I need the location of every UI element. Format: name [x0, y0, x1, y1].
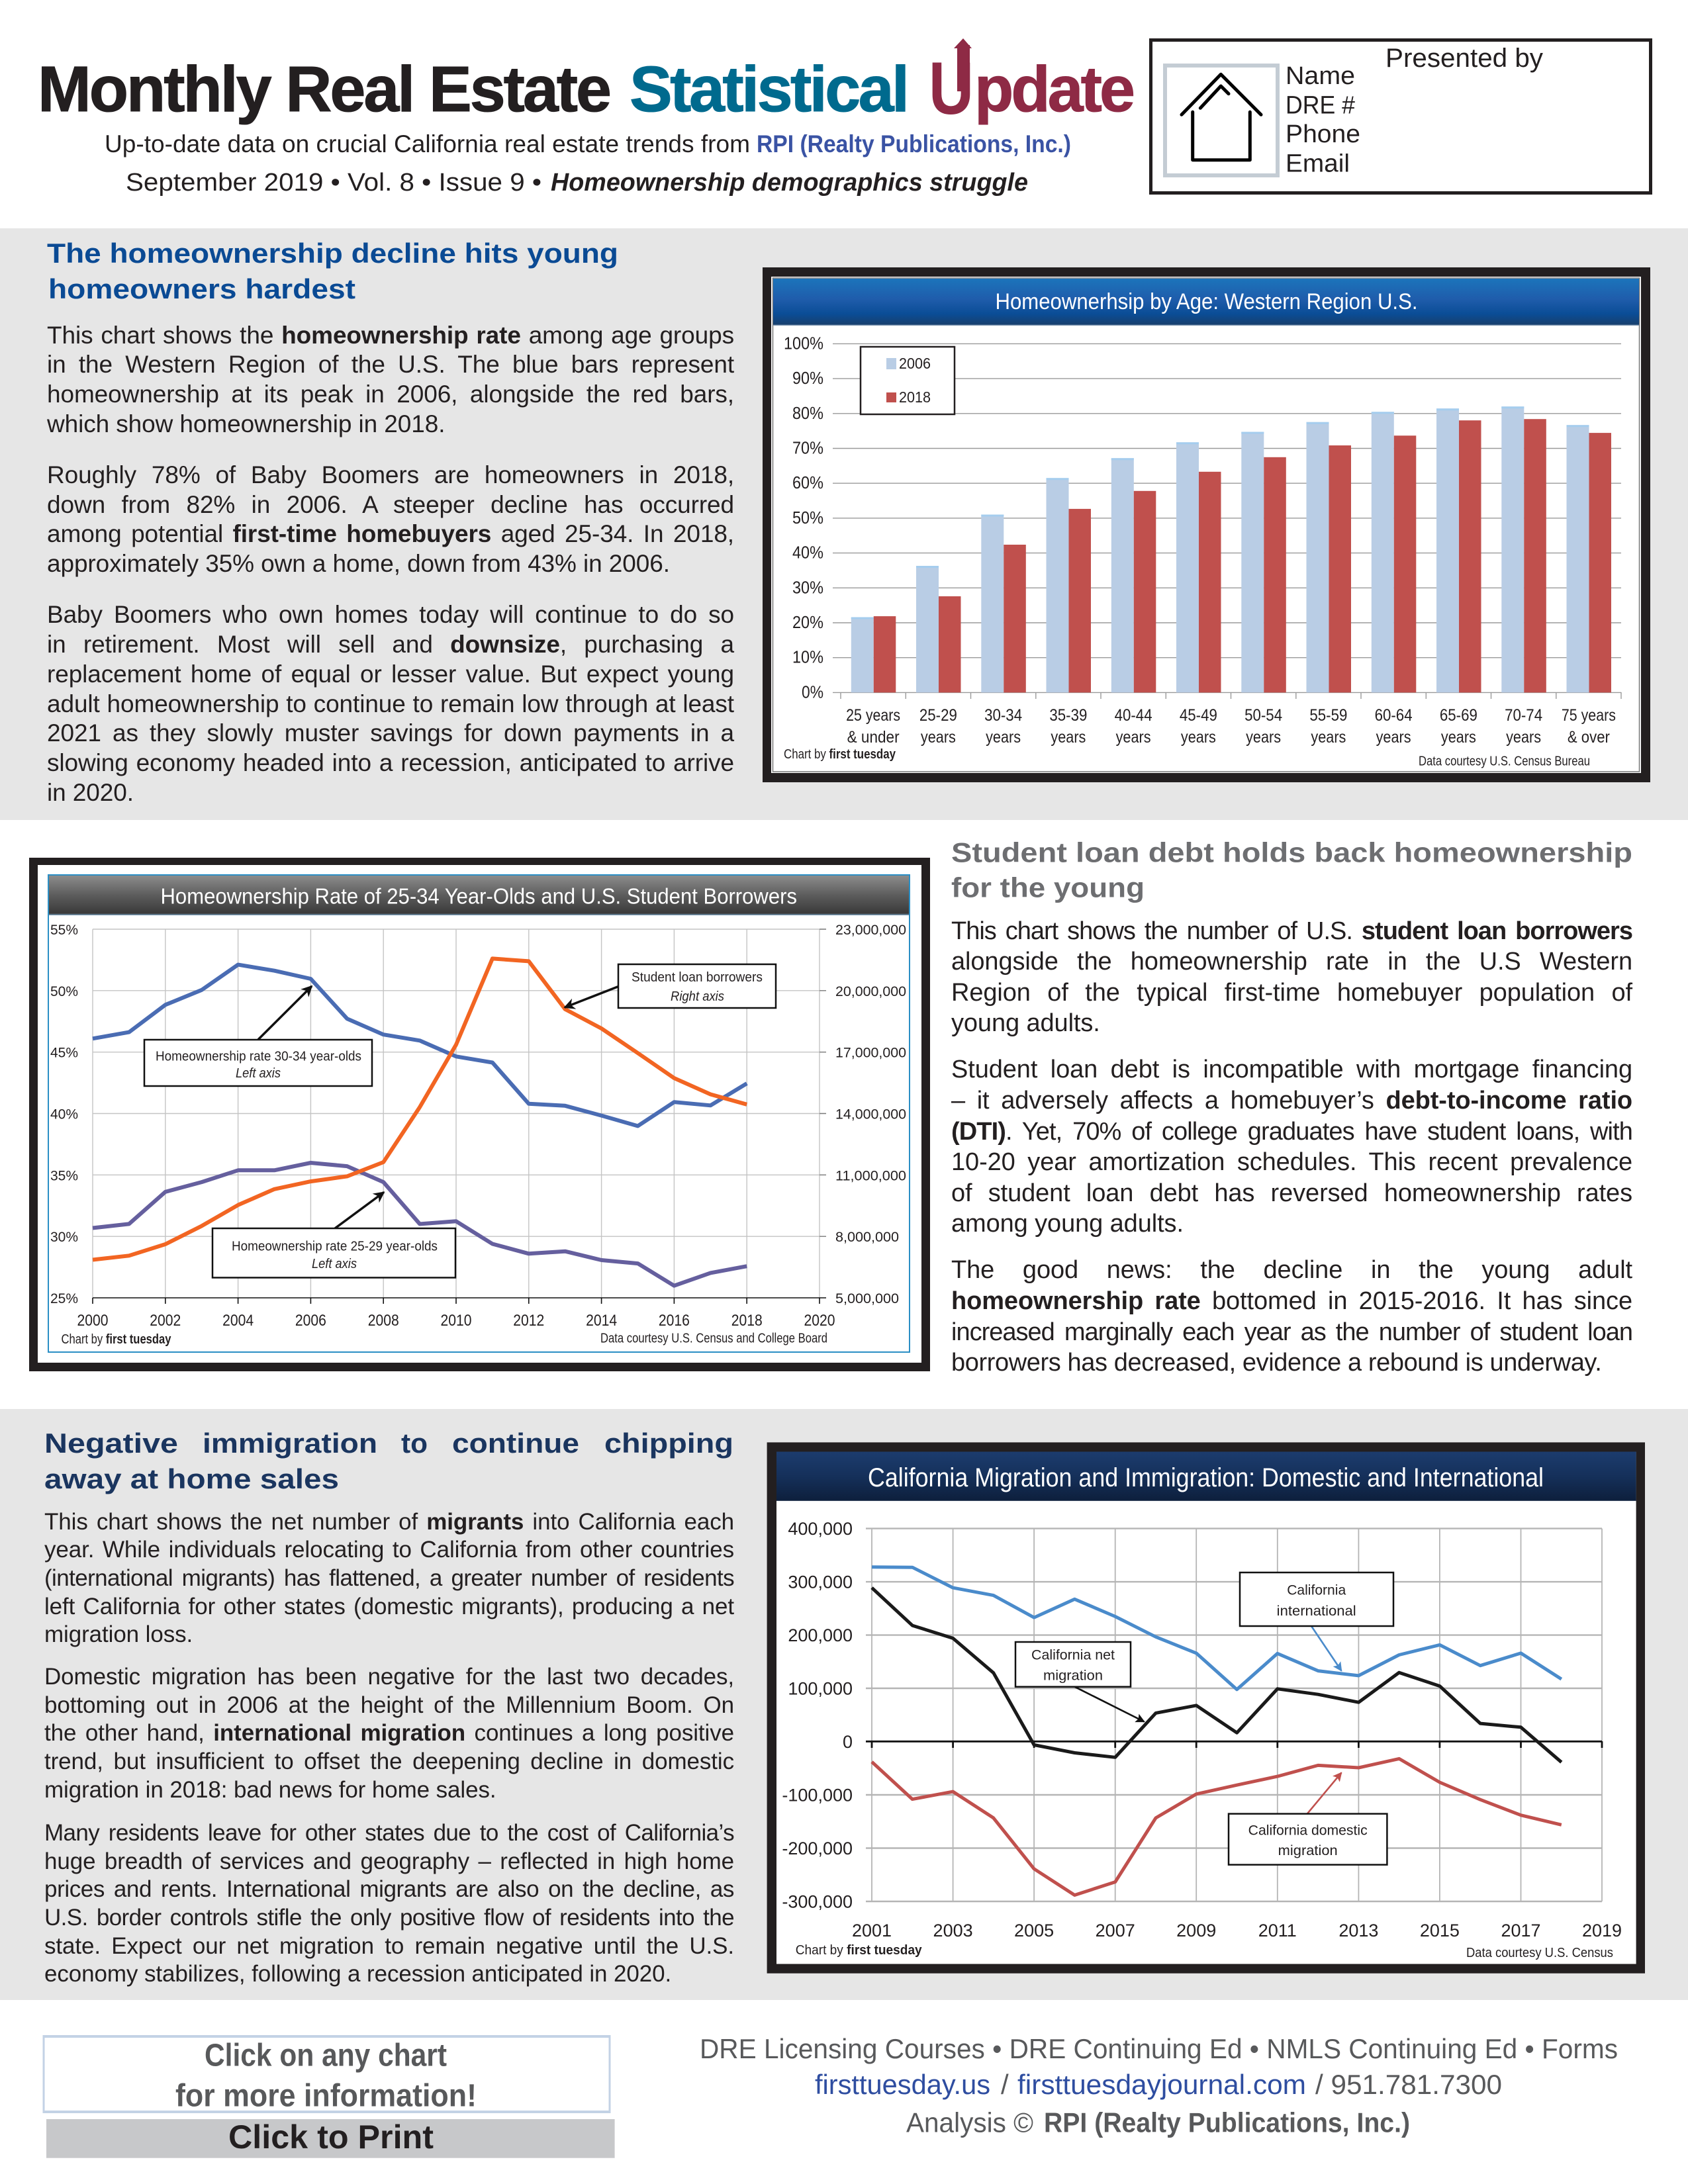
- x axis labels: years: [1051, 728, 1086, 747]
- text block: paragraph 1: which show homeownership in 2018.: [47, 410, 445, 437]
- footer contact line: firsttuesday.us: [815, 2069, 990, 2100]
- text block: paragraph 2: the other hand, international migration continues a long positive: [44, 1720, 734, 1746]
- x axis labels: 2020: [804, 1312, 835, 1330]
- chart credit: Chart by first tuesday: [784, 747, 896, 762]
- x axis labels: 2012: [513, 1312, 544, 1330]
- y axis labels: 20%: [792, 612, 823, 632]
- x axis labels: years: [1116, 728, 1151, 747]
- y axis labels: 90%: [792, 368, 823, 388]
- text block: paragraph 3: in 2020.: [47, 779, 134, 806]
- x axis labels: 30-34: [984, 706, 1022, 725]
- x axis labels: 25 years: [846, 706, 900, 725]
- text block: paragraph 2: [44, 1664, 734, 1803]
- text block: paragraph 3: Baby Boomers who own homes today will continue to do so: [47, 601, 734, 628]
- callout: click on any chart: for more information!: [175, 2079, 477, 2114]
- title: Monthly Real Estate: [38, 53, 612, 125]
- title: pdate: [974, 53, 1135, 125]
- y axis labels: -200,000: [782, 1839, 853, 1858]
- text block: paragraph 1: This chart shows the number of U.S. student loan borrowers: [951, 917, 1632, 945]
- y axis labels: 400,000: [788, 1519, 853, 1539]
- x axis labels: years: [1376, 728, 1411, 747]
- subtitle: Up-to-date data on crucial California real estate trends from: [105, 130, 750, 158]
- x axis labels: & under: [847, 728, 900, 747]
- footer analysis line: Analysis ©: [906, 2107, 1033, 2138]
- y axis labels: 0: [843, 1732, 853, 1752]
- callout: international: California: [1287, 1583, 1346, 1598]
- text block: paragraph 2: among young adults.: [951, 1210, 1184, 1238]
- text block: paragraph 1: This chart shows the homeownership rate among age groups: [47, 322, 734, 348]
- right axis labels: 14,000,000: [835, 1107, 906, 1122]
- x axis labels: [846, 706, 1616, 747]
- text block: paragraph 2: [47, 461, 734, 577]
- x axis labels: 2009: [1176, 1921, 1216, 1940]
- heading: Negative: [44, 1428, 178, 1459]
- callout: net migration: California net: [1031, 1647, 1115, 1662]
- y axis labels: 80%: [792, 403, 823, 423]
- x axis labels: 2011: [1258, 1921, 1297, 1940]
- right axis labels: [835, 923, 906, 1306]
- x axis labels: 2001: [852, 1921, 892, 1940]
- presenter box: Name: [1286, 62, 1355, 90]
- footer analysis line: RPI (Realty Publications, Inc.): [1044, 2107, 1410, 2138]
- callout: 25-29 year-olds: [212, 1192, 455, 1277]
- series: 2006 bars: [851, 406, 1589, 692]
- heading: immigration: [203, 1428, 377, 1459]
- callout: domestic migration: [1229, 1772, 1387, 1865]
- x axis labels: 2014: [586, 1312, 617, 1330]
- presenter box: Presented by: [1385, 44, 1543, 73]
- chart title: Homeownership Rate of 25-34 Year-Olds and U.S. Student Borrowers: [160, 884, 797, 909]
- callout: 30-34 year-olds: [144, 986, 372, 1086]
- x axis labels: 40-44: [1115, 706, 1152, 725]
- y axis labels: 40%: [792, 543, 823, 563]
- callout: student loan borrowers: Right axis: [671, 989, 724, 1004]
- y axis labels: 100,000: [788, 1678, 853, 1698]
- chart title: California Migration and Immigration: Domestic and International: [868, 1463, 1544, 1492]
- x axis labels: years: [921, 728, 956, 747]
- footer contact line: [815, 2069, 1502, 2100]
- x axis labels: 2002: [150, 1312, 181, 1330]
- callout: domestic migration: migration: [1278, 1843, 1338, 1858]
- series: homeownership rate 25-29: [93, 1163, 747, 1286]
- callout: 25-29 year-olds: Homeownership rate 25-29 year-olds: [232, 1240, 438, 1254]
- callout: international: international: [1277, 1604, 1356, 1619]
- subtitle: [105, 130, 1071, 158]
- text block: paragraph 1: This chart shows the net number of migrants into California each: [44, 1509, 734, 1535]
- text block: paragraph 3: Many residents leave for other states due to the cost of California’s: [44, 1820, 734, 1846]
- presenter box: Phone: [1286, 120, 1360, 148]
- text block: paragraph 2: 10-20 year amortization schedules. This recent prevalence: [951, 1148, 1632, 1176]
- text block: paragraph 2: migration in 2018: bad news for home sales.: [44, 1777, 496, 1803]
- text block: paragraph 3: homeownership rate bottomed in 2015-2016. It has since: [951, 1287, 1632, 1315]
- text block: paragraph 2: Domestic migration has been negative for the last two decades,: [44, 1664, 734, 1690]
- axis: [866, 1741, 1602, 1748]
- callout: student loan borrowers: Student loan borrowers: [632, 970, 763, 985]
- heading: homeowners hardest: [48, 273, 355, 304]
- text block: paragraph 2: down from 82% in 2006. A steeper decline has occurred: [47, 491, 734, 518]
- line chart: ownership rate vs student borrowers: [29, 858, 930, 1371]
- callout: 30-34 year-olds: Left axis: [236, 1066, 281, 1081]
- heading: for the young: [951, 872, 1145, 903]
- heading: [951, 837, 1632, 903]
- line chart: california migration: [767, 1442, 1645, 1974]
- callout: 30-34 year-olds: Homeownership rate 30-34 year-olds: [156, 1049, 361, 1064]
- panel: migration: [0, 1409, 1688, 2000]
- series: international: [872, 1567, 1562, 1690]
- callout: 25-29 year-olds: Left axis: [312, 1257, 357, 1271]
- text block: paragraph 2: Roughly 78% of Baby Boomers are homeowners in 2018,: [47, 461, 734, 488]
- series: 2018 bars: [874, 419, 1611, 692]
- right axis labels: 20,000,000: [835, 984, 906, 999]
- callout: student loan borrowers: [565, 964, 776, 1008]
- footer contact line: firsttuesdayjournal.com: [1017, 2069, 1306, 2100]
- x axis labels: years: [1181, 728, 1216, 747]
- panel: footer: [42, 2033, 1618, 2158]
- x axis labels: 2007: [1096, 1921, 1135, 1940]
- text block: paragraph 3: in retirement. Most will sell and downsize, purchasing a: [47, 631, 734, 658]
- x axis labels: 2010: [441, 1312, 471, 1330]
- x axis labels: & over: [1568, 728, 1610, 747]
- text block: paragraph 1: [951, 917, 1632, 1037]
- title: Statistical: [630, 53, 910, 125]
- text block: paragraph 1: year. While individuals relocating to California from other countries: [44, 1537, 734, 1563]
- legend: 2018: [899, 388, 931, 406]
- callout: click on any chart: Click on any chart: [205, 2038, 447, 2073]
- presenter box: [1150, 40, 1651, 193]
- x axis labels: 2000: [77, 1312, 109, 1330]
- x axis labels: years: [1506, 728, 1541, 747]
- text block: paragraph 2: among potential first-time homebuyers aged 25-34. In 2018,: [47, 520, 734, 547]
- text block: paragraph 2: Student loan debt is incompatible with mortgage financing: [951, 1056, 1632, 1083]
- footer contact line: /: [1001, 2069, 1009, 2100]
- right axis labels: 8,000,000: [835, 1230, 899, 1245]
- x axis labels: 2004: [222, 1312, 254, 1330]
- x axis labels: 55-59: [1309, 706, 1347, 725]
- heading: chipping: [604, 1428, 733, 1459]
- callout: click on any chart: [43, 2035, 610, 2114]
- heading: Student loan debt holds back homeownership: [951, 837, 1632, 868]
- callout: domestic migration: California domestic: [1248, 1823, 1368, 1839]
- x axis labels: 60-64: [1375, 706, 1413, 725]
- y axis labels: -100,000: [782, 1786, 853, 1805]
- text block: paragraph 2: bottoming out in 2006 at the height of the Millennium Boom. On: [44, 1692, 734, 1718]
- text block: paragraph 2: approximately 35% own a home, down from 43% in 2006.: [47, 550, 670, 577]
- right axis labels: 17,000,000: [835, 1046, 906, 1061]
- x axis labels: [77, 1312, 835, 1330]
- text block: paragraph 3: The good news: the decline in the young adult: [951, 1256, 1632, 1284]
- x axis labels: [852, 1921, 1622, 1940]
- x axis labels: 25-29: [919, 706, 957, 725]
- text block: paragraph 3: slowing economy headed into a recession, anticipated to arrive: [47, 749, 734, 776]
- x axis labels: 45-49: [1180, 706, 1217, 725]
- series: homeownership rate 30-34: [93, 965, 747, 1126]
- x axis labels: 2018: [731, 1312, 763, 1330]
- chart title: [49, 876, 909, 915]
- callout: net migration: migration: [1043, 1668, 1103, 1684]
- text block: paragraph 3: U.S. border controls stifle the only positive flow of residents into the: [44, 1905, 734, 1931]
- y axis labels: 300,000: [788, 1572, 853, 1592]
- y axis labels: 0%: [802, 682, 823, 702]
- x axis labels: 2019: [1582, 1921, 1622, 1940]
- text block: paragraph 3: economy stabilizes, following a recession anticipated in 2020.: [44, 1961, 671, 1987]
- panel: homeownership by age: [0, 228, 1688, 820]
- text block: paragraph 2: – it adversely affects a homebuyer’s debt-to-income ratio: [951, 1087, 1632, 1115]
- data source: Data courtesy U.S. Census and College Board: [600, 1332, 827, 1346]
- legend: 2006: [899, 355, 931, 372]
- x axis labels: 35-39: [1049, 706, 1087, 725]
- text block: paragraph 3: prices and rents. International migrants are also on the decline, as: [44, 1876, 734, 1902]
- axis: [93, 1298, 826, 1304]
- heading line 2: away at home sales: [44, 1463, 339, 1494]
- x axis labels: 2005: [1014, 1921, 1054, 1940]
- y axis labels: 100%: [784, 334, 823, 353]
- button: click to print: [46, 2118, 615, 2158]
- x axis labels: 2015: [1420, 1921, 1460, 1940]
- y axis labels: 30%: [792, 577, 823, 597]
- text block: paragraph 1: migration loss.: [44, 1621, 193, 1647]
- callout: international: [1240, 1572, 1393, 1671]
- chart title: Homeownerhsip by Age: Western Region U.S.: [996, 289, 1418, 314]
- icon: house: [1165, 66, 1278, 175]
- y axis labels: [782, 1519, 853, 1911]
- grid lines: [833, 343, 1621, 699]
- footer analysis line: [906, 2107, 1410, 2138]
- left axis labels: 45%: [50, 1046, 78, 1061]
- right axis labels: 11,000,000: [835, 1168, 906, 1183]
- text block: paragraph 3: [47, 601, 735, 806]
- chart credit: Chart by first tuesday: [796, 1943, 923, 1958]
- left axis labels: 35%: [50, 1168, 78, 1183]
- x axis labels: 2008: [368, 1312, 399, 1330]
- text block: paragraph 1: alongside the homeownership rate in the U.S Western: [951, 948, 1632, 976]
- x axis labels: years: [1246, 728, 1281, 747]
- text block: paragraph 3: adult homeownership to continue to remain low through at least: [47, 690, 734, 717]
- series: net migration: [872, 1588, 1562, 1762]
- text block: paragraph 2: (DTI). Yet, 70% of college graduates have student loans, with: [951, 1118, 1632, 1146]
- text block: paragraph 3: replacement home of equal or lesser value. But expect young: [47, 660, 734, 688]
- y axis labels: 60%: [792, 473, 823, 492]
- left axis labels: 25%: [50, 1291, 78, 1306]
- heading: to: [401, 1428, 428, 1459]
- callout: net migration: [1015, 1642, 1145, 1722]
- text block: paragraph 2: [951, 1056, 1632, 1238]
- button: click to print: Click to Print: [228, 2118, 434, 2156]
- series: student loan borrowers: [93, 958, 747, 1260]
- x axis labels: 70-74: [1505, 706, 1542, 725]
- text block: paragraph 1: [44, 1509, 734, 1647]
- text block: paragraph 3: [44, 1820, 734, 1987]
- panel: student loan debt: [29, 837, 1632, 1377]
- text block: paragraph 3: huge breadth of services and geography – reflected in high home: [44, 1848, 734, 1874]
- x axis labels: 2006: [295, 1312, 326, 1330]
- text block: paragraph 3: [951, 1256, 1632, 1377]
- right axis labels: 5,000,000: [835, 1291, 899, 1306]
- data source: Data courtesy U.S. Census: [1466, 1946, 1613, 1960]
- text block: paragraph 1: [47, 322, 734, 437]
- x axis labels: 75 years: [1562, 706, 1616, 725]
- presenter box: DRE #: [1286, 92, 1355, 120]
- left axis labels: 55%: [50, 923, 78, 938]
- presenter box: Email: [1286, 150, 1350, 177]
- issue line: [126, 169, 1028, 197]
- text block: paragraph 1: left California for other states (domestic migrants), producing a net: [44, 1594, 734, 1619]
- x axis labels: 2016: [659, 1312, 690, 1330]
- y axis labels: [784, 334, 823, 702]
- heading: The homeownership decline hits young: [47, 238, 618, 269]
- left axis labels: 40%: [50, 1107, 78, 1122]
- text block: paragraph 1: in the Western Region of the U.S. The blue bars represent: [47, 351, 734, 378]
- left axis labels: [50, 923, 78, 1306]
- series: domestic: [872, 1758, 1562, 1895]
- x axis labels: years: [1311, 728, 1346, 747]
- heading: continue: [452, 1428, 579, 1459]
- y axis labels: -300,000: [782, 1891, 853, 1911]
- footer courses line: DRE Licensing Courses • DRE Continuing Ed • NMLS Continuing Ed • Forms: [700, 2033, 1618, 2064]
- footer contact line: / 951.781.7300: [1315, 2069, 1502, 2100]
- left axis labels: 30%: [50, 1230, 78, 1245]
- right axis labels: 23,000,000: [835, 923, 906, 938]
- y axis labels: 10%: [792, 647, 823, 667]
- y axis labels: 50%: [792, 508, 823, 527]
- grid lines: [866, 1529, 1602, 1901]
- text block: paragraph 3: state. Expect our net migration to remain negative until the U.S.: [44, 1933, 734, 1959]
- issue line: Homeownership demographics struggle: [551, 169, 1028, 197]
- text block: paragraph 2: of student loan debt has reversed homeownership rates: [951, 1179, 1632, 1207]
- x axis labels: 2003: [933, 1921, 973, 1940]
- x axis labels: 2017: [1501, 1921, 1541, 1940]
- legend: [861, 347, 955, 414]
- chart title: [773, 279, 1639, 326]
- x axis labels: years: [986, 728, 1021, 747]
- chart title: [776, 1452, 1636, 1501]
- y axis labels: 70%: [792, 438, 823, 458]
- text block: paragraph 1: (international migrants) has flattened, a greater number of residents: [44, 1565, 734, 1591]
- text block: paragraph 3: borrowers has decreased, evidence a rebound is underway.: [951, 1349, 1601, 1377]
- x axis labels: 2013: [1338, 1921, 1378, 1940]
- text block: paragraph 3: increased marginally each year as the number of student loan: [951, 1318, 1632, 1346]
- text block: paragraph 1: Region of the typical first-time homebuyer population of: [951, 979, 1632, 1007]
- heading: [47, 238, 618, 304]
- subtitle: RPI (Realty Publications, Inc.): [757, 130, 1071, 158]
- issue line: September 2019 • Vol. 8 • Issue 9 •: [126, 169, 541, 197]
- bar chart: homeownership by age: [763, 267, 1650, 782]
- y axis labels: 200,000: [788, 1625, 853, 1645]
- text block: paragraph 1: young adults.: [951, 1009, 1100, 1037]
- grid lines: [93, 929, 826, 1298]
- text block: paragraph 1: homeownership at its peak in 2006, alongside the red bars,: [47, 381, 734, 408]
- x axis labels: 50-54: [1244, 706, 1282, 725]
- left axis labels: 50%: [50, 984, 78, 999]
- text block: paragraph 2: trend, but insufficient to offset the deepening decline in domestic: [44, 1749, 734, 1774]
- title: [38, 38, 1135, 130]
- data source: Data courtesy U.S. Census Bureau: [1419, 754, 1590, 769]
- x axis labels: years: [1441, 728, 1476, 747]
- x axis labels: 65-69: [1440, 706, 1477, 725]
- text block: paragraph 3: 2021 as they slowly muster savings for down payments in a: [47, 719, 734, 747]
- panel: masthead: [38, 38, 1652, 197]
- chart credit: Chart by first tuesday: [61, 1332, 171, 1347]
- title: U: [929, 47, 974, 130]
